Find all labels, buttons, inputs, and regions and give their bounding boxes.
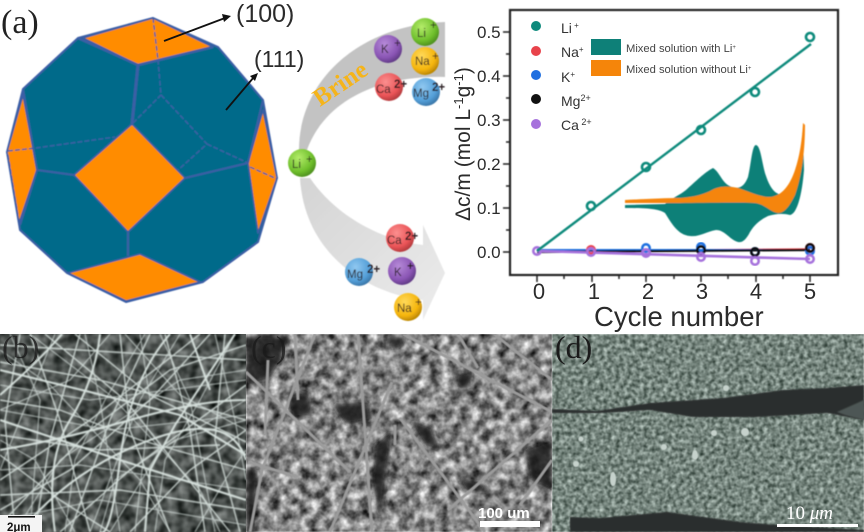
scale bar 10 µm — [777, 503, 858, 527]
y tick labels: 0.5 — [477, 23, 501, 42]
y axis title: -1 — [451, 97, 466, 109]
y axis title: ) — [452, 67, 475, 74]
ion: K bottom: + — [407, 261, 414, 273]
x tick labels: 0 — [533, 279, 545, 304]
inset: cyclic voltammetry curves — [625, 123, 805, 242]
legend: mixed solutions — [591, 39, 752, 76]
legend: ions: K — [561, 69, 570, 85]
curve: with Li+ — [625, 137, 804, 242]
legend: mixed solutions: Mixed solution with Li — [626, 43, 732, 55]
panel: (d) SEM nanosheet-coated fibres — [552, 334, 864, 532]
x tick labels: 2 — [642, 279, 654, 304]
legend: mixed solutions: + — [732, 45, 736, 51]
ion: Ca top: Ca — [376, 84, 391, 96]
label (a): (a) — [1, 4, 39, 41]
ion: Mg top: Mg — [413, 88, 429, 100]
panel: brine ion selectivity schematic — [288, 18, 445, 321]
scale bar 2 µm — [0, 515, 42, 532]
legend: ions — [531, 20, 592, 133]
ion: Ca top — [375, 73, 407, 101]
ion: Ca bottom — [386, 224, 418, 252]
plot frame and ticks — [503, 10, 838, 282]
ion: K top: + — [394, 38, 401, 50]
brine arc arrow — [299, 22, 445, 152]
dark gaps between fibres — [552, 385, 864, 532]
label (b): (b) — [2, 329, 39, 365]
ion: Li top: + — [430, 20, 437, 32]
legend: ions: Mg — [561, 93, 580, 109]
orange (100) faces — [7, 18, 277, 301]
ion: K bottom: K — [394, 267, 402, 279]
ion: Ca bottom: Ca — [387, 235, 402, 247]
ion: Mg bottom — [345, 258, 380, 286]
label (111) with arrow — [226, 46, 304, 110]
marker: Na+ — [531, 46, 541, 56]
ion: Mg bottom: 2+ — [367, 264, 380, 276]
marker: Ca2+ — [531, 119, 541, 129]
legend: ions: Na — [561, 44, 579, 60]
panel: chart of delta c/m versus cycle number — [451, 10, 838, 332]
marker: Li+ — [531, 21, 541, 31]
polyhedron body — [7, 18, 277, 302]
ion: Li top — [411, 18, 439, 46]
ion: Na bottom: Na — [397, 303, 412, 315]
ion: Mg top: 2+ — [432, 82, 445, 94]
ion: Na bottom: + — [415, 297, 422, 309]
y axis title: g — [452, 86, 475, 97]
y tick labels: 0.1 — [477, 199, 501, 218]
marker: K+ — [531, 70, 541, 80]
scale bar 10 µm: 10 μm — [786, 503, 833, 524]
ion: Na top: Na — [415, 56, 430, 68]
lower grey arrow — [300, 178, 445, 320]
legend: ions: 2+ — [579, 117, 592, 127]
legend: ions: Ca — [561, 117, 579, 133]
ion: Ca top: 2+ — [394, 79, 407, 91]
series: flat ions — [533, 243, 814, 265]
polyhedron edges — [8, 18, 277, 256]
y axis title: Δc/m (mol L — [452, 109, 475, 221]
scale bar 100 um — [478, 505, 540, 527]
ion: Na top — [411, 47, 439, 75]
ion: Na bottom — [394, 293, 422, 321]
label (d): (d) — [555, 329, 592, 365]
label (100) with arrow — [164, 0, 294, 41]
label (100) with arrow: (100) — [236, 0, 294, 28]
ion: Na top: + — [432, 51, 439, 63]
legend: ions: Li — [561, 20, 572, 36]
ion: Li centre: + — [306, 154, 313, 166]
legend: mixed solutions: Mixed solution without Li — [626, 64, 748, 76]
ion: Ca bottom: 2+ — [405, 231, 418, 243]
ion: K top — [374, 35, 402, 63]
y tick labels: 0.3 — [477, 111, 501, 130]
x tick labels: 1 — [588, 279, 600, 304]
ion: K top: K — [381, 44, 389, 56]
legend: ions: + — [570, 70, 575, 79]
dark voids — [246, 336, 552, 532]
y tick labels: 0.4 — [477, 67, 501, 86]
fibre network — [0, 334, 246, 532]
y tick labels: 0.2 — [477, 155, 501, 174]
swatch: with Li+ — [591, 39, 621, 55]
x axis title: Cycle number — [594, 301, 764, 332]
legend: ions: 2+ — [580, 93, 591, 103]
legend: ions: + — [579, 45, 584, 54]
legend: mixed solutions: + — [748, 66, 752, 72]
y tick labels — [477, 23, 501, 262]
legend: ions: + — [572, 21, 579, 30]
marker: Mg2+ — [531, 94, 541, 104]
ion: Li centre: Li — [292, 159, 301, 171]
label (c): (c) — [251, 329, 287, 365]
panel: (b) SEM nanofibres — [0, 334, 246, 532]
x tick labels — [533, 279, 816, 304]
y axis title: -1 — [451, 74, 466, 86]
series: Li+ fit line and points — [537, 33, 814, 251]
scale bar 100 um: 100 um — [478, 505, 530, 522]
brine label: Brine — [308, 56, 373, 112]
swatch: without Li+ — [591, 60, 621, 76]
ion: Li top: Li — [417, 28, 426, 40]
panel: (a) crystal polyhedron — [7, 18, 277, 302]
rods — [246, 334, 552, 532]
ion: Li centre — [288, 149, 316, 177]
x tick labels: 3 — [696, 279, 708, 304]
label (111) with arrow: (111) — [254, 46, 304, 72]
ion: K bottom — [388, 257, 416, 285]
ion: Mg bottom: Mg — [347, 269, 363, 281]
panel: (c) SEM aggregates and rods — [246, 334, 552, 532]
y tick labels: 0.0 — [477, 243, 501, 262]
ion: Mg top — [412, 78, 445, 106]
x tick labels: 5 — [804, 279, 816, 304]
shaded right end of gap — [837, 400, 864, 420]
bright particles — [573, 385, 749, 486]
curve: without Li+ — [625, 123, 805, 213]
x tick labels: 4 — [750, 279, 762, 304]
